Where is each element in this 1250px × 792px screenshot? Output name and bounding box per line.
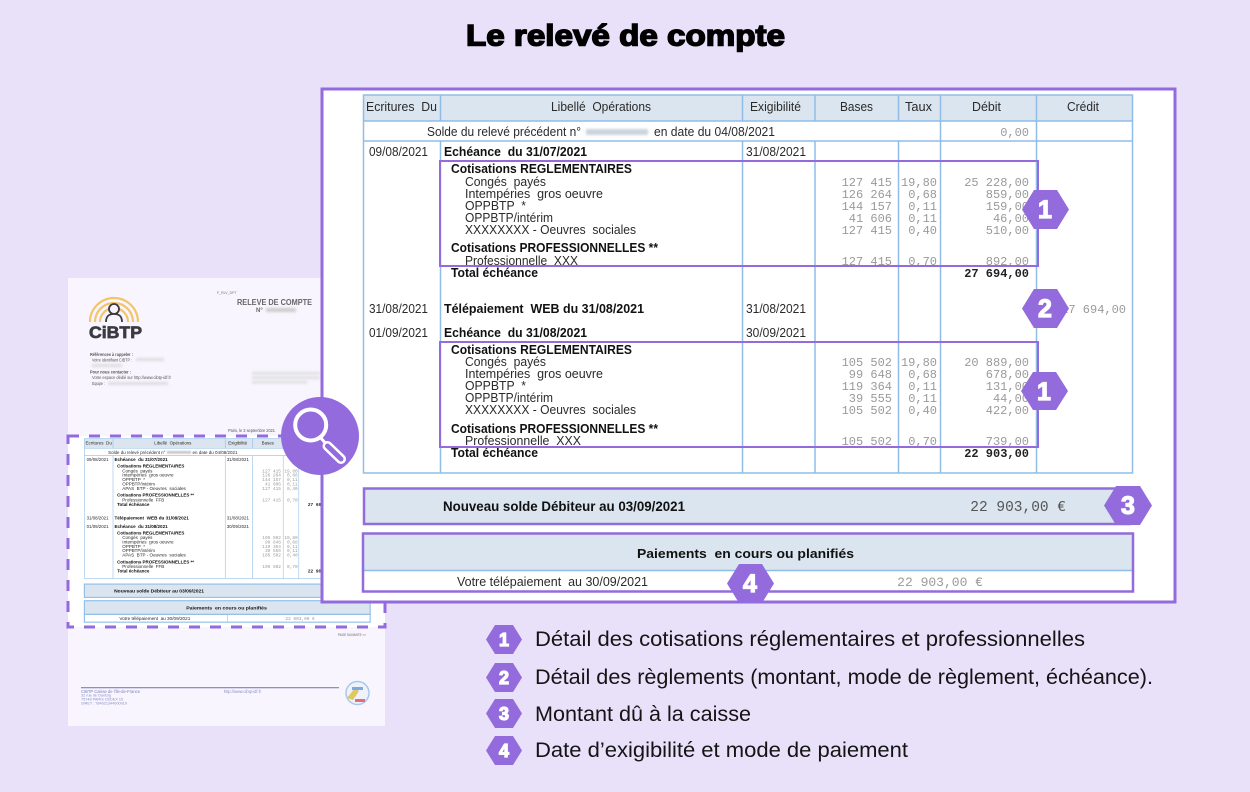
thumbnail table: Votre télépaiement au 30/09/2021 — [119, 616, 191, 622]
thumbnail table: Professionnelle FFB — [122, 498, 164, 504]
thumbnail table: 22 903,00 — [308, 569, 332, 575]
thumbnail table: Ecritures Du — [86, 441, 112, 447]
table header row: Exigibilité — [750, 99, 801, 114]
table grid — [363, 95, 1132, 473]
second due date block: 39 555 — [849, 392, 892, 406]
legend item 2: Détail des règlements (montant, mode de règlement, échéance). — [535, 666, 1153, 689]
thumbnail header: title: N° — [256, 308, 263, 314]
first due date block: Echéance du 31/07/2021 — [444, 144, 587, 159]
thumbnail table: APAS BTP - Oeuvres sociales — [122, 486, 186, 492]
thumbnail table: 0,40 — [287, 486, 298, 492]
first due date block: 0,40 — [908, 224, 937, 238]
thumbnail table: 127 415 — [262, 486, 281, 492]
first due date block: 0,68 — [908, 188, 937, 202]
thumbnail table: Intempéries gros oeuvre — [122, 539, 174, 545]
thumbnail table: OPPBTP/intérim — [122, 548, 155, 554]
thumbnail table: 0,40 — [287, 553, 298, 559]
thumbnail references: Votre identifiant CiBTP : — [92, 358, 132, 362]
thumbnail table: Nouveau solde Débiteur au 03/09/2021 — [114, 589, 204, 595]
badge 2: payment: 2 — [1038, 295, 1052, 323]
highlight box: second contributions — [440, 342, 1038, 447]
previous balance row: en date du 04/08/2021 — [654, 124, 775, 139]
first due date block: Professionnelle XXX — [465, 253, 578, 268]
badge 4: payment date: 4 — [743, 570, 757, 598]
new balance bar: Nouveau solde Débiteur au 03/09/2021 — [443, 498, 685, 514]
thumbnail references: Références à rappeler : — [90, 352, 133, 357]
thumbnail table: 105 502 — [262, 535, 281, 541]
first due date block: 127 415 — [842, 255, 892, 269]
thumbnail table: 144 157 — [262, 477, 281, 483]
first due date block: 41 606 — [849, 212, 892, 226]
thumbnail table: 99 648 — [265, 539, 281, 545]
second due date block: 19,80 — [901, 356, 937, 370]
thumbnail table: Total échéance — [117, 569, 150, 575]
legend item 2: 2 — [499, 668, 509, 688]
thumbnail table: 0,11 — [287, 477, 298, 483]
second due date block: 105 502 — [842, 435, 892, 449]
thumbnail table: Télépaiement WEB du 31/08/2021 — [114, 515, 189, 521]
new balance bar: 22 903,00 € — [970, 500, 1066, 516]
thumbnail table: APAS BTP - Oeuvres sociales — [122, 553, 186, 559]
thumbnail table: Cotisations REGLEMENTAIRES — [117, 464, 185, 470]
thumbnail table: 19,80 — [284, 468, 298, 474]
table header row: Crédit — [1067, 99, 1099, 114]
thumbnail table: 31/08/2021 — [227, 457, 249, 463]
thumbnail table: Congés payés — [122, 468, 153, 474]
panel: thumbnail of the full statement — [68, 278, 385, 726]
second due date block: 0,70 — [908, 435, 937, 449]
badge 1: second contributions — [1021, 372, 1068, 410]
thumbnail references: Votre espace dédié sur http://www.cibtp-idf.fr — [92, 375, 171, 380]
thumbnail table: Solde du relevé précédent n° — [108, 450, 165, 456]
thumbnail table: 27 694,00 — [308, 502, 332, 508]
thumbnail table: 0,11 — [287, 482, 298, 488]
legend — [486, 625, 1153, 765]
first due date block: Intempéries gros oeuvre — [465, 186, 603, 201]
thumbnail table: Cotisations PROFESSIONNELLES ** — [117, 493, 194, 499]
payment row: Télépaiement WEB du 31/08/2021 — [444, 301, 644, 316]
second due date block: 105 502 — [842, 356, 892, 370]
thumbnail table: 119 364 — [262, 544, 281, 550]
icon: magnifying glass — [281, 397, 359, 475]
thumbnail header: logo — [89, 298, 142, 342]
second due date block: 119 364 — [842, 380, 892, 394]
thumbnail table: 30/09/2021 — [227, 524, 249, 530]
thumbnail references: Paris, le 3 septembre 2021 — [228, 428, 275, 433]
second due date block: 20 889,00 — [964, 356, 1029, 370]
second due date block: Intempéries gros oeuvre — [465, 366, 603, 381]
thumbnail table: Echéance du 31/07/2021 — [114, 457, 168, 463]
previous balance row — [427, 124, 1029, 140]
second due date block: 0,11 — [908, 392, 937, 406]
thumbnail dashed highlight — [68, 436, 385, 627]
second due date block: OPPBTP * — [465, 378, 526, 393]
thumbnail footer: CIBTP Caisse de l'Île-de-France — [81, 688, 140, 694]
badge 2: payment — [1022, 289, 1069, 328]
legend item 1: Détail des cotisations réglementaires et professionnelles — [535, 628, 1085, 651]
thumbnail header: title — [217, 291, 313, 314]
previous balance row: Solde du relevé précédent n° — [427, 124, 581, 139]
previous balance row: 0,00 — [1000, 126, 1029, 140]
thumbnail table: 0,70 — [287, 498, 298, 504]
thumbnail table: Paiements en cours ou planifiés — [186, 606, 267, 612]
thumbnail references: Pour nous contacter : — [90, 370, 131, 374]
first due date block: 126 264 — [842, 188, 892, 202]
second due date block: 01/09/2021 — [369, 325, 428, 340]
thumbnail white excerpt area — [68, 436, 385, 627]
thumbnail header: logo: CiBTP — [89, 323, 142, 342]
first due date block: OPPBTP/intérim — [465, 210, 553, 225]
thumbnail table: 41 606 — [265, 482, 281, 488]
second due date block: 44,00 — [993, 392, 1029, 406]
first due date block: XXXXXXXX - Oeuvres sociales — [465, 222, 636, 237]
first due date block: 09/08/2021 — [369, 144, 428, 159]
thumbnail table — [84, 439, 370, 622]
second due date block: 0,68 — [908, 368, 937, 382]
highlight box: first contributions — [440, 161, 1038, 266]
thumbnail table: 39 555 — [265, 548, 281, 554]
first due date block — [369, 144, 1029, 281]
badge 1: first contributions — [1022, 190, 1069, 229]
badge 3: balance: 3 — [1121, 492, 1135, 520]
legend item 4 — [486, 736, 908, 765]
first due date block: Cotisations REGLEMENTAIRES — [451, 161, 632, 176]
thumbnail footer: http://www.cibtp-idf.fr — [224, 689, 261, 694]
first due date block: 892,00 — [986, 255, 1029, 269]
payment row: 31/08/2021 — [369, 301, 428, 316]
second due date block: 739,00 — [986, 435, 1029, 449]
first due date block: 0,11 — [908, 200, 937, 214]
thumbnail table: 22 903,00 € — [285, 616, 315, 622]
second due date block: 678,00 — [986, 368, 1029, 382]
thumbnail table: OPPBTP * — [122, 544, 145, 550]
thumbnail table: Cotisations REGLEMENTAIRES — [117, 530, 185, 536]
thumbnail table: 0,11 — [287, 544, 298, 550]
thumbnail table: 31/08/2021 — [87, 515, 109, 521]
table header row: Taux — [905, 99, 932, 114]
first due date block: 159,00 — [986, 200, 1029, 214]
second due date block: Cotisations PROFESSIONNELLES ** — [451, 421, 659, 436]
second due date block: Congés payés — [465, 354, 546, 369]
thumbnail table: 105 502 — [262, 553, 281, 559]
thumbnail table: 127 415 — [262, 468, 281, 474]
badge 3: balance — [1104, 486, 1152, 525]
second due date block: Total échéance — [451, 445, 538, 460]
first due date block: 127 415 — [842, 176, 892, 190]
first due date block: Total échéance — [451, 265, 538, 280]
payment row: 31/08/2021 — [746, 301, 806, 316]
legend item 4: Date d’exigibilité et mode de paiement — [535, 739, 908, 762]
first due date block: 25 228,00 — [964, 176, 1029, 190]
legend item 3 — [486, 699, 751, 728]
second due date block: Echéance du 31/08/2021 — [444, 325, 587, 340]
badge 1: second contributions: 1 — [1037, 378, 1051, 406]
thumbnail table: 0,11 — [287, 548, 298, 554]
thumbnail table: 0,70 — [287, 564, 298, 570]
thumbnail table: Professionnelle FFB — [122, 564, 164, 570]
first due date block: 144 157 — [842, 200, 892, 214]
thumbnail table: Cotisations PROFESSIONNELLES ** — [117, 560, 194, 566]
second due date block: 22 903,00 — [964, 447, 1029, 461]
legend item 4: 4 — [499, 741, 509, 761]
thumbnail table: Echéance du 31/08/2021 — [114, 524, 168, 530]
thumbnail table: Exigibilité — [228, 441, 247, 447]
title: Le relevé de compte — [466, 20, 785, 52]
thumbnail references — [90, 352, 320, 433]
thumbnail table: Bases — [262, 441, 274, 447]
thumbnail table: 09/08/2021 — [87, 457, 109, 463]
thumbnail footer: PAGE SUIVANTE >> — [338, 633, 366, 637]
new balance bar — [364, 488, 1130, 524]
thumbnail header: title: RELEVE DE COMPTE — [237, 298, 313, 307]
second due date block: 30/09/2021 — [746, 325, 806, 340]
thumbnail header: title: F_RLV_DPT — [217, 291, 237, 295]
second due date block: Cotisations REGLEMENTAIRES — [451, 342, 632, 357]
panel: enlarged statement excerpt — [322, 89, 1175, 602]
first due date block: 510,00 — [986, 224, 1029, 238]
payment row — [369, 301, 1126, 317]
thumbnail table: 01/09/2021 — [87, 524, 109, 530]
thumbnail footer: 75748 PARIS CEDEX 15 — [81, 698, 123, 702]
first due date block: Congés payés — [465, 174, 546, 189]
thumbnail table: 19,80 — [284, 535, 298, 541]
thumbnail table: 31/08/2021 — [227, 515, 249, 521]
legend item 1 — [486, 625, 1085, 654]
thumbnail table: 126 264 — [262, 473, 281, 479]
legend item 3: 3 — [499, 704, 509, 724]
thumbnail footer — [81, 633, 369, 706]
second due date block: 422,00 — [986, 404, 1029, 418]
second due date block: XXXXXXXX - Oeuvres sociales — [465, 402, 636, 417]
legend item 1: 1 — [499, 630, 509, 650]
thumbnail table: 127 415 — [262, 498, 281, 504]
second due date block: 131,00 — [986, 380, 1029, 394]
thumbnail table: OPPBTP * — [122, 477, 145, 483]
thumbnail table: 105 502 — [262, 564, 281, 570]
thumbnail footer: SIRET : 784621344000019 — [81, 702, 127, 706]
thumbnail table: 0,68 — [287, 473, 298, 479]
table header row: Bases — [840, 99, 873, 114]
thumbnail table: 0,68 — [287, 539, 298, 545]
thumbnail table: OPPBTP/intérim — [122, 482, 155, 488]
second due date block: 0,11 — [908, 380, 937, 394]
first due date block: 46,00 — [993, 212, 1029, 226]
first due date block: Cotisations PROFESSIONNELLES ** — [451, 240, 659, 255]
thumbnail table: Total échéance — [117, 502, 150, 508]
badge 4: payment date — [727, 564, 774, 603]
first due date block: 0,70 — [908, 255, 937, 269]
planned payments box — [363, 533, 1133, 592]
table header row: Ecritures Du — [366, 99, 437, 114]
first due date block: 127 415 — [842, 224, 892, 238]
second due date block: OPPBTP/intérim — [465, 390, 553, 405]
second due date block: 105 502 — [842, 404, 892, 418]
second due date block — [369, 325, 1029, 461]
thumbnail table: en date du 04/08/2021 — [193, 450, 238, 456]
first due date block: 859,00 — [986, 188, 1029, 202]
thumbnail references: Equipe : — [92, 381, 105, 386]
thumbnail table: Libellé Opérations — [154, 441, 192, 447]
second due date block: 0,40 — [908, 404, 937, 418]
thumbnail table: Intempéries gros oeuvre — [122, 473, 174, 479]
planned payments box: Votre télépaiement au 30/09/2021 — [457, 574, 648, 589]
first due date block: 0,11 — [908, 212, 937, 226]
table header row: Débit — [972, 99, 1001, 114]
first due date block: 19,80 — [901, 176, 937, 190]
planned payments box: Paiements en cours ou planifiés — [637, 546, 854, 561]
table header row: Libellé Opérations — [551, 99, 651, 114]
thumbnail footer: 32 rue de Dantzig — [81, 694, 111, 698]
thumbnail table: Congés payés — [122, 535, 153, 541]
first due date block: OPPBTP * — [465, 198, 526, 213]
payment row: 27 694,00 — [1061, 303, 1126, 317]
badge 1: first contributions: 1 — [1038, 196, 1052, 224]
legend item 3: Montant dû à la caisse — [535, 703, 751, 726]
first due date block: 27 694,00 — [964, 267, 1029, 281]
second due date block: Professionnelle XXX — [465, 433, 581, 448]
table header row — [363, 95, 1132, 121]
planned payments box: 22 903,00 € — [897, 575, 983, 590]
first due date block: 31/08/2021 — [746, 144, 806, 159]
second due date block: 99 648 — [849, 368, 892, 382]
